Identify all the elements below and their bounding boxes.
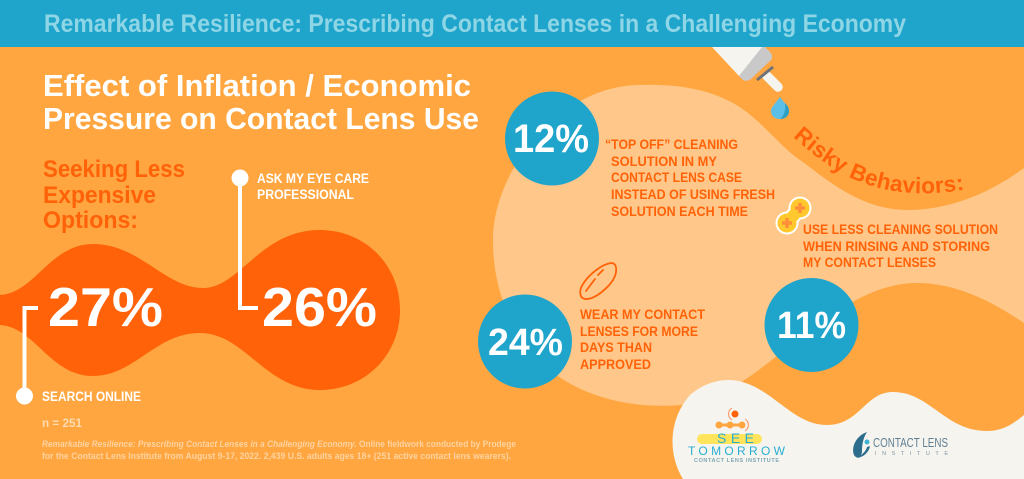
- logo: see tomorrow: SEE: [717, 430, 754, 446]
- stat: 27% search online: SEARCH ONLINE: [42, 389, 141, 404]
- stat: 11% use less solution: MY CONTACT LENSES: [803, 255, 936, 270]
- icon: contact lens case: [776, 196, 812, 234]
- stat: 12% top off: CONTACT LENS CASE: [611, 170, 742, 185]
- stat: 24% wear longer: DAYS THAN: [580, 340, 652, 355]
- logo: see tomorrow: TOMORROW: [688, 444, 786, 458]
- heading text: risky behaviors: Risky Behaviors:: [794, 126, 962, 194]
- title: Remarkable Resilience: Prescribing Contact Lenses in a Challenging Economy: [44, 10, 906, 38]
- stat: 12% top off: 12%: [513, 117, 589, 161]
- stat: 11% use less solution: 11%: [777, 305, 846, 347]
- stat: 24% wear longer: LENSES FOR MORE: [580, 324, 698, 339]
- footnote: for the Contact Lens Institute from August 9-17, 2022. 2,439 U.S. adults ages 18+ (251 active contact lens wearers).: [42, 451, 511, 462]
- panel: logo area: [673, 380, 1024, 479]
- icon: eye drop bottle: [712, 47, 789, 119]
- logo: see tomorrow: [688, 408, 786, 464]
- panel: risky behaviors background: [493, 85, 1024, 406]
- stat: 11% use less solution: USE LESS CLEANING SOLUTION: [803, 222, 998, 237]
- logo: contact lens institute: [853, 432, 948, 458]
- sample size: n = 251: [42, 416, 82, 430]
- heading: seeking less expensive options: [43, 156, 185, 234]
- stat: 12% top off: INSTEAD OF USING FRESH: [611, 187, 775, 202]
- icon: contact lens: [580, 263, 616, 299]
- stat: 12% top off: SOLUTION IN MY: [611, 154, 717, 169]
- stat: 24% wear longer: WEAR MY CONTACT: [580, 307, 706, 322]
- footnote: [42, 439, 516, 462]
- stat: 27% search online: [16, 276, 163, 404]
- heading: risky behaviors: [793, 137, 962, 193]
- logo: contact lens institute: INSTITUTE: [875, 451, 948, 457]
- stat: 24% wear longer: [478, 294, 706, 388]
- heading: effect of inflation: Effect of Inflation / Economic: [43, 68, 471, 103]
- stat: 27% search online: 27%: [48, 276, 163, 338]
- stat: 26% ask my eye care professional: PROFESSIONAL: [257, 187, 354, 202]
- stat: 12% top off: [505, 92, 775, 219]
- heading: seeking less expensive options: Seeking Less: [43, 156, 185, 183]
- stat: 24% wear longer: 24%: [488, 322, 563, 364]
- heading: seeking less expensive options: Expensive: [43, 182, 156, 209]
- stat: 11% use less solution: WHEN RINSING AND STORING: [803, 239, 990, 254]
- stat: 11% use less solution: [764, 222, 998, 372]
- heading: seeking less expensive options: Options:: [43, 207, 138, 234]
- logo: contact lens institute: CONTACT LENS: [873, 436, 948, 450]
- heading: effect of inflation: Pressure on Contact Lens Use: [43, 101, 479, 136]
- logo: see tomorrow: CONTACT LENS INSTITUTE: [694, 458, 779, 464]
- stat: 24% wear longer: APPROVED: [580, 357, 651, 372]
- stat: 12% top off: “TOP OFF” CLEANING: [605, 137, 738, 152]
- footnote: Remarkable Resilience: Prescribing Contact Lenses in a Challenging Economy. Online fieldwork conducted by Prodege: [42, 439, 516, 450]
- stat: 26% ask my eye care professional: [232, 170, 377, 338]
- stat: 26% ask my eye care professional: ASK MY EYE CARE: [257, 171, 369, 186]
- header band: [0, 0, 1024, 47]
- stat: 26% ask my eye care professional: 26%: [262, 276, 377, 338]
- chart: dark orange blobs: [0, 230, 400, 390]
- stat: 12% top off: SOLUTION EACH TIME: [611, 204, 748, 219]
- heading: effect of inflation: [43, 68, 479, 136]
